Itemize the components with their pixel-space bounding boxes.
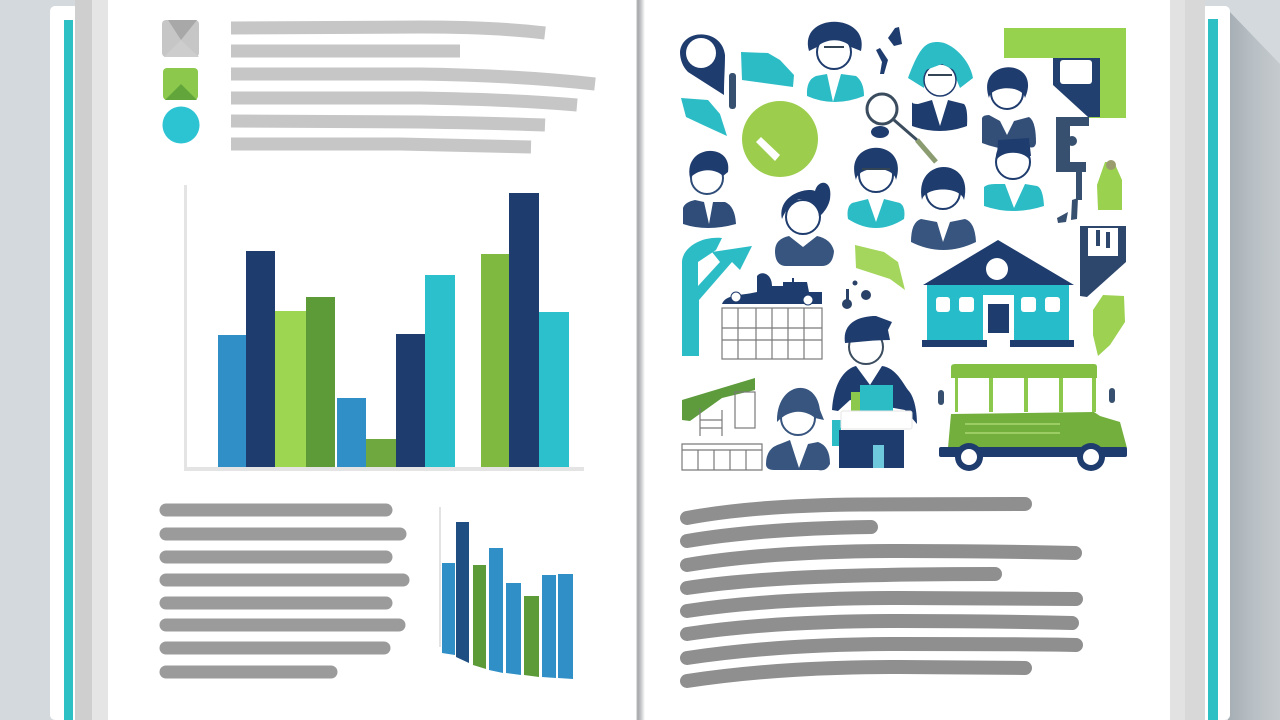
icon: person 9: [766, 388, 830, 470]
icon: worker holding box: [832, 316, 917, 468]
icon: outlined building: [722, 273, 822, 359]
icon: person 3: [982, 67, 1036, 149]
icon: person 8: [911, 167, 976, 250]
icon: person 5: [683, 151, 736, 228]
icon: green leaf shapes: [855, 245, 1125, 356]
left page edge: [50, 0, 108, 720]
icon: green circle: [742, 101, 818, 177]
icon: navy pin right: [1080, 226, 1126, 297]
icon: green corner frame: [1004, 28, 1126, 118]
right page edge: [1170, 0, 1230, 720]
icon: person 6 with bun: [775, 183, 834, 266]
icon: green school bus: [938, 364, 1127, 471]
lower left text lines: [166, 510, 403, 672]
legend swatches: [162, 20, 200, 144]
icon: small keys: [842, 280, 871, 309]
header text lines: [231, 27, 595, 147]
icon: person 7: [848, 148, 904, 228]
icon: person 1: [807, 22, 864, 102]
main bar chart: [184, 185, 584, 471]
icon: small navy keys: [876, 27, 902, 74]
lower right text lines: [687, 504, 1076, 681]
small bar chart: [439, 507, 573, 679]
icon: teal signpost arrow: [682, 238, 752, 356]
icon: magnifier: [867, 94, 936, 162]
icon: mini green building: [682, 378, 762, 470]
icon: map pin: [680, 34, 736, 109]
icon: teal folded shapes: [681, 52, 794, 136]
left page: [108, 0, 637, 720]
icon: person 4: [984, 138, 1044, 211]
icon: school house: [922, 240, 1074, 347]
icon: green shape right: [1097, 160, 1122, 210]
right page: [641, 0, 1170, 720]
icon: navy connector: [1056, 117, 1089, 223]
icon: person 2 teal hair: [908, 42, 973, 131]
book spine: [636, 0, 645, 720]
